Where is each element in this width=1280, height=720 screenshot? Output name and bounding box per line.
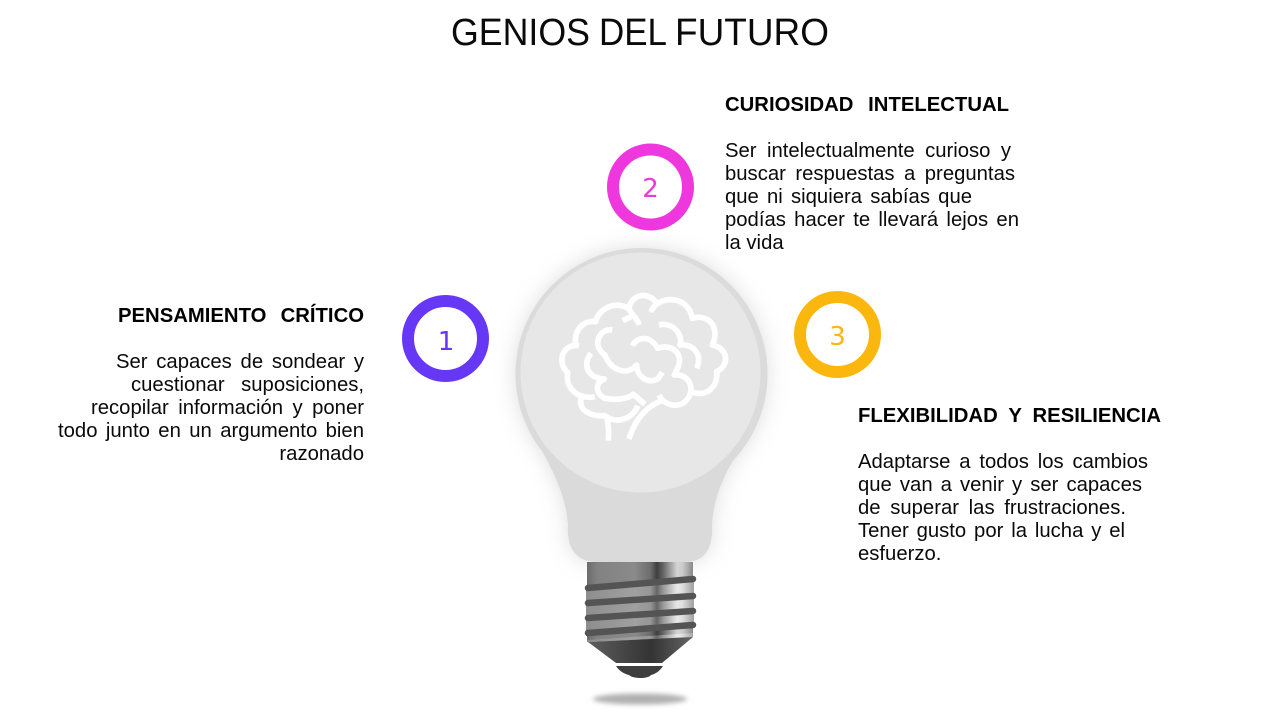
- title: GENIOS: [451, 12, 590, 54]
- body text: pensamiento crítico: recopilar información y poner: [91, 397, 364, 419]
- title: FUTURO: [675, 12, 829, 54]
- heading: pensamiento crítico: PENSAMIENTO CRÍTICO: [118, 305, 364, 327]
- body text: flexibilidad y resiliencia: [858, 451, 1148, 565]
- title: DEL: [599, 12, 667, 54]
- body text: curiosidad intelectual: la vida: [725, 232, 784, 254]
- body text: flexibilidad y resiliencia: Tener gusto por la lucha y el: [858, 520, 1125, 542]
- number ring 2: 2: [642, 174, 659, 204]
- body text: pensamiento crítico: [58, 351, 364, 465]
- bulb screw base: [586, 562, 694, 678]
- bulb floor shadow: [593, 694, 687, 704]
- number ring 3: [800, 297, 875, 372]
- body text: flexibilidad y resiliencia: que van a venir y ser capaces: [858, 474, 1142, 496]
- number ring 2: [613, 150, 688, 224]
- text block: curiosidad intelectual: [725, 94, 1019, 254]
- body text: pensamiento crítico: todo junto en un argumento bien: [58, 420, 364, 442]
- bulb glass: [516, 248, 768, 562]
- body text: pensamiento crítico: razonado: [279, 443, 364, 465]
- body text: pensamiento crítico: cuestionar suposiciones,: [131, 374, 364, 396]
- bulb glow: [516, 248, 768, 562]
- body text: flexibilidad y resiliencia: Adaptarse a todos los cambios: [858, 451, 1148, 473]
- icon: brain: [562, 296, 726, 441]
- number ring 3: 3: [829, 322, 846, 352]
- body text: flexibilidad y resiliencia: esfuerzo.: [858, 543, 941, 565]
- body text: curiosidad intelectual: que ni siquiera sabías que: [725, 186, 972, 208]
- body text: curiosidad intelectual: buscar respuestas a preguntas: [725, 163, 1015, 185]
- body text: curiosidad intelectual: Ser intelectualmente curioso y: [725, 140, 1011, 162]
- number ring 1: 1: [438, 327, 454, 357]
- text block: flexibilidad y resiliencia: [858, 405, 1161, 565]
- body text: pensamiento crítico: Ser capaces de sondear y: [116, 351, 364, 373]
- heading: curiosidad intelectual: CURIOSIDAD INTELECTUAL: [725, 94, 1009, 116]
- text block: pensamiento crítico: [58, 304, 364, 465]
- icon: light bulb: [516, 248, 768, 704]
- heading: flexibilidad y resiliencia: FLEXIBILIDAD Y RESILIENCIA: [858, 405, 1161, 427]
- title: [451, 12, 829, 54]
- body text: flexibilidad y resiliencia: de superar las frustraciones.: [858, 497, 1126, 519]
- body text: curiosidad intelectual: [725, 140, 1019, 254]
- body text: curiosidad intelectual: podías hacer te llevará lejos en: [725, 209, 1019, 231]
- number ring 1: [408, 301, 483, 376]
